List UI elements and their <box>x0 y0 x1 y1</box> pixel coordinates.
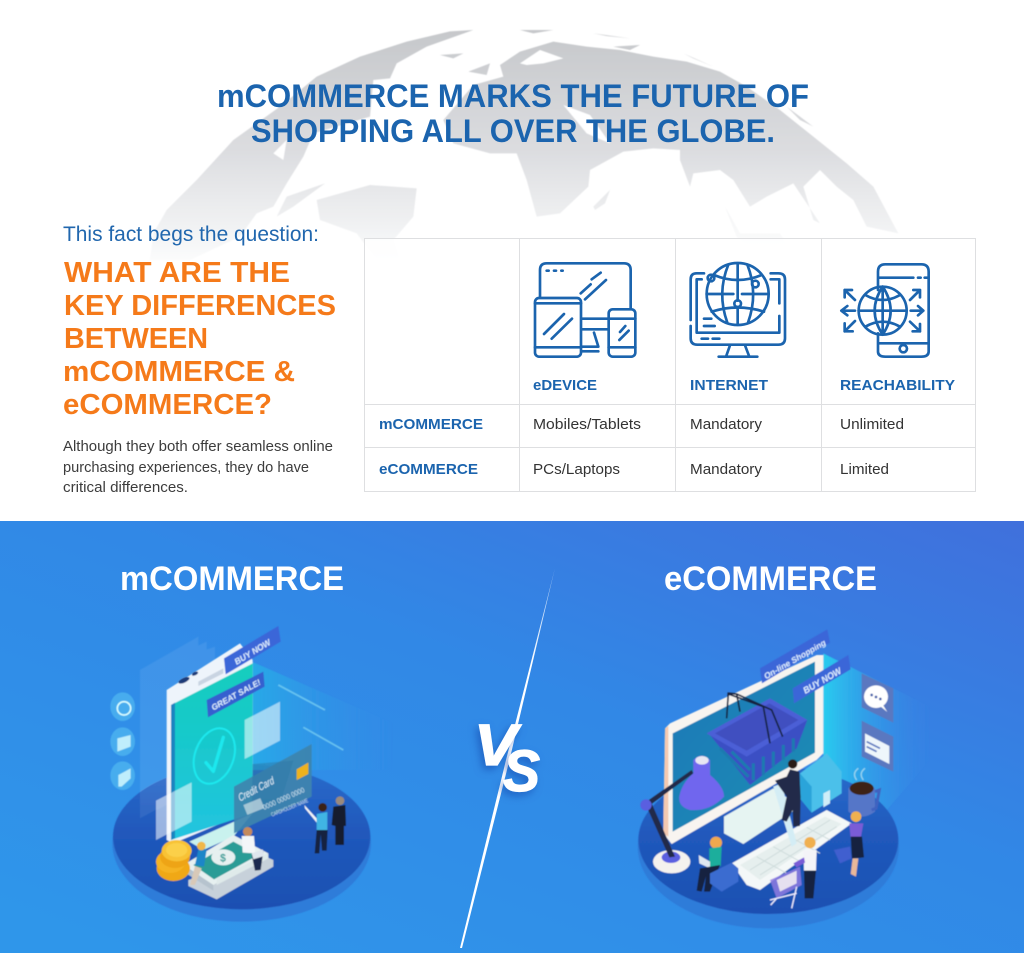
buy now tag: BUY NOW <box>801 665 844 696</box>
row: mCOMMERCE: Mandatory <box>690 417 763 433</box>
side icons <box>110 692 135 790</box>
row: eCOMMERCE <box>379 461 889 478</box>
gold coins <box>156 840 192 881</box>
icon: internet globe on monitor <box>691 263 785 357</box>
orange question heading: WHAT ARE THE <box>64 257 290 289</box>
coffee mug <box>848 768 879 817</box>
panel: blue comparison banner <box>0 521 1024 953</box>
light beam <box>252 662 393 770</box>
banknotes stack <box>183 835 273 899</box>
heading: eCOMMERCE: eCOMMERCE <box>664 560 877 598</box>
credit card: Credit Card <box>237 774 276 804</box>
orange question heading: BETWEEN <box>64 323 208 355</box>
platform disc <box>112 764 371 922</box>
row: mCOMMERCE: Unlimited <box>840 417 904 433</box>
row: eCOMMERCE: eCOMMERCE <box>379 461 478 478</box>
description paragraph: Although they both offer seamless online <box>63 439 333 455</box>
seated man <box>242 827 264 871</box>
column headers: REACHABILITY <box>840 377 955 394</box>
icon: reachability phone with arrows <box>841 264 929 357</box>
orange question heading: mCOMMERCE & <box>63 356 295 388</box>
buy now tag <box>224 626 281 674</box>
row: mCOMMERCE: Mobiles/Tablets <box>533 417 641 433</box>
monitor <box>663 655 823 844</box>
buy now tag <box>793 655 851 703</box>
credit card <box>234 744 312 833</box>
check mark circle <box>186 722 242 790</box>
column headers <box>533 377 955 394</box>
boxes <box>800 753 842 813</box>
column headers: eDEVICE <box>533 377 597 394</box>
orange question heading: KEY DIFFERENCES <box>64 290 336 322</box>
comparison table <box>364 238 976 492</box>
shopping basket <box>707 693 807 785</box>
globe sea inlets <box>520 50 563 65</box>
row: eCOMMERCE: PCs/Laptops <box>533 462 620 478</box>
keyboard <box>732 810 852 890</box>
desk lamp <box>640 756 724 873</box>
row: mCOMMERCE <box>379 416 904 433</box>
banknotes stack: $ <box>220 853 226 865</box>
description paragraph <box>63 439 333 496</box>
phone <box>167 643 253 850</box>
platform disc <box>638 765 899 928</box>
chat card <box>862 673 893 723</box>
seated woman <box>190 842 207 885</box>
great sale tag: GREAT SALE! <box>209 677 263 712</box>
credit card: CARDHOLDER NAME <box>270 798 309 819</box>
light beam <box>823 653 930 833</box>
description paragraph: purchasing experiences, they do have <box>63 460 309 476</box>
payment card <box>862 721 893 772</box>
illustration: desktop commerce <box>638 629 930 928</box>
translucent sheets <box>140 637 215 818</box>
heading: mCOMMERCE: mCOMMERCE <box>120 560 344 598</box>
translucent cards <box>245 702 280 759</box>
row: mCOMMERCE: mCOMMERCE <box>379 416 483 433</box>
orange question heading <box>63 257 336 421</box>
column headers: INTERNET <box>690 377 768 394</box>
icon: devices <box>535 263 635 357</box>
credit card: 0000 0000 0000 <box>261 785 306 812</box>
VS badge: V <box>474 713 522 778</box>
row: eCOMMERCE: Limited <box>840 462 889 478</box>
buy now tag: BUY NOW <box>233 637 273 667</box>
woman with laptop <box>697 837 738 892</box>
row: eCOMMERCE: Mandatory <box>690 462 763 478</box>
VS badge: S <box>503 739 540 804</box>
orange question heading: eCOMMERCE? <box>63 389 272 421</box>
woman with cart <box>770 837 817 908</box>
title: mCOMMERCE MARKS THE FUTURE OF <box>217 78 809 114</box>
monitor stand <box>724 788 800 844</box>
online shopping tag: On-line Shopping <box>762 637 828 681</box>
standing man in suit <box>332 796 346 845</box>
divider line <box>460 568 555 948</box>
globe background <box>150 30 898 277</box>
lead-in line: This fact begs the question: <box>63 223 319 246</box>
illustration: mobile phone commerce <box>110 626 393 922</box>
description paragraph: critical differences. <box>63 480 188 496</box>
man on ladder <box>773 759 801 847</box>
VS badge <box>474 713 540 804</box>
standing man pointing <box>304 803 328 853</box>
woman with basket <box>834 811 864 877</box>
title: SHOPPING ALL OVER THE GLOBE. <box>251 113 775 149</box>
title <box>217 78 809 149</box>
intro text block <box>63 223 336 496</box>
